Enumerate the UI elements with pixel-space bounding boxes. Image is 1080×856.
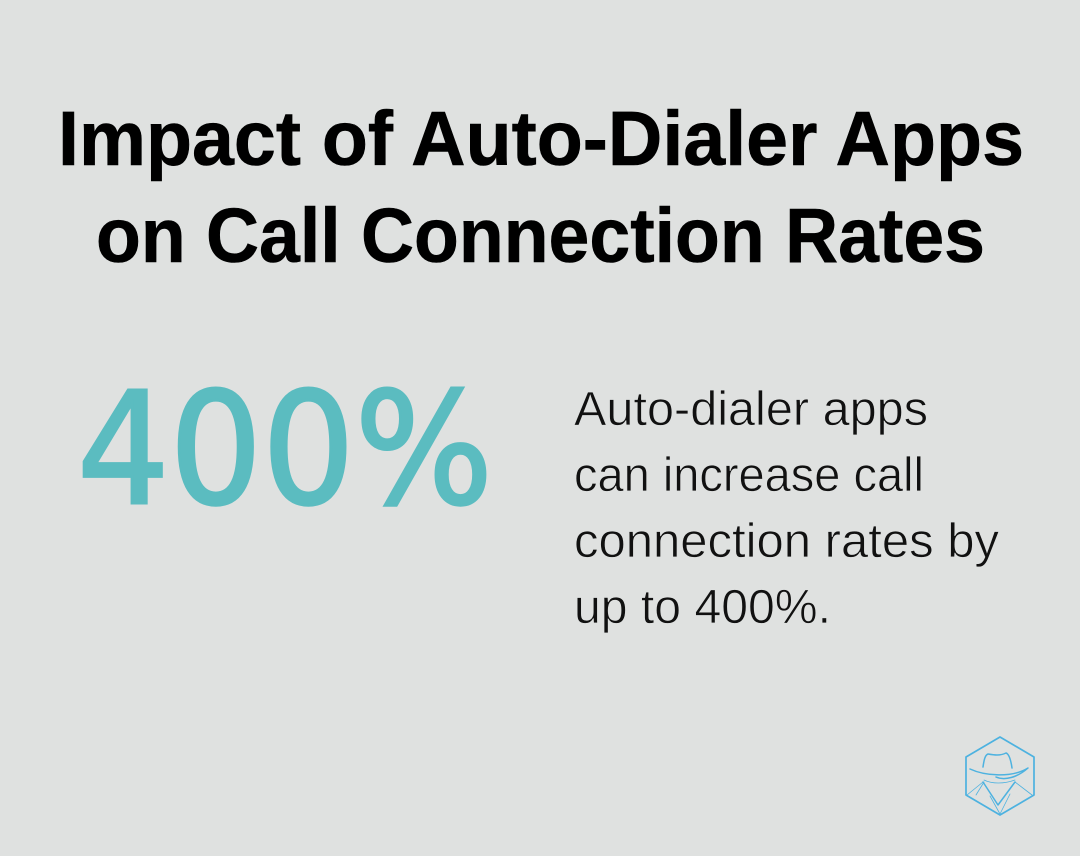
title: Impact of Auto-Dialer Apps xyxy=(58,96,1024,182)
title xyxy=(58,96,1024,279)
big statistic: 400%: 400% xyxy=(77,359,493,540)
description text: can increase call xyxy=(574,449,924,502)
description text: connection rates by xyxy=(574,515,999,568)
description text: up to 400%. xyxy=(574,581,831,634)
description text xyxy=(574,383,999,634)
icon: hexagon logo with spy hat xyxy=(966,737,1034,815)
description text: Auto-dialer apps xyxy=(574,383,928,436)
title: on Call Connection Rates xyxy=(96,193,985,279)
